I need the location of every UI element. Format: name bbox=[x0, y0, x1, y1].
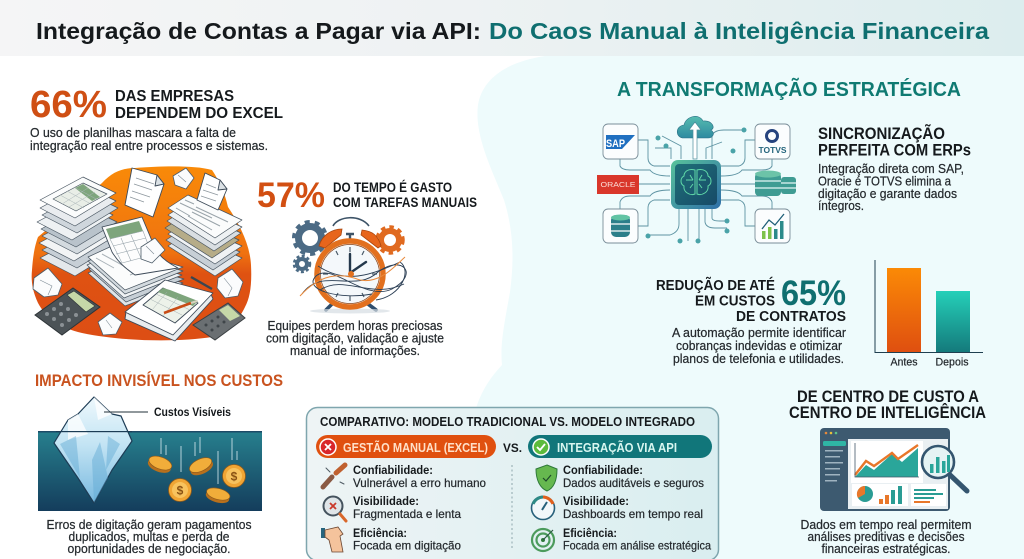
block: redução 65%: REDUÇÃO DE ATÉ bbox=[656, 276, 775, 294]
bar chart: antes e depois bbox=[875, 260, 983, 368]
SAP box: SAP bbox=[606, 138, 625, 150]
text: dados em tempo real bbox=[800, 518, 972, 556]
SAP box bbox=[603, 124, 638, 159]
text: equipes perdem horas: com digitação, validação e ajuste bbox=[266, 332, 444, 346]
stat: 66% das empresas bbox=[30, 84, 283, 153]
icon: broken chain bbox=[323, 465, 345, 487]
crumpled paper balls bbox=[33, 168, 243, 335]
bar chart: antes e depois: Antes bbox=[890, 356, 918, 368]
vs: VS. bbox=[503, 441, 522, 455]
database box bbox=[603, 209, 638, 243]
icon: target bbox=[532, 529, 554, 551]
pill: gestão manual bbox=[316, 435, 496, 458]
right rows: Visibilidade: bbox=[563, 494, 629, 508]
blue gear bbox=[294, 222, 326, 254]
tilted coin bbox=[187, 455, 215, 478]
diagram: ERP integration circuit bbox=[597, 116, 796, 244]
iceberg bbox=[54, 397, 132, 503]
dollar coin bbox=[222, 464, 246, 488]
database icon right bbox=[755, 170, 796, 196]
text: erros de digitação: duplicados, multas e perda de bbox=[68, 530, 230, 544]
pill: integração via api: INTEGRAÇÃO VIA API bbox=[557, 440, 677, 455]
circuit nodes bbox=[646, 128, 746, 244]
Oracle box: ORACLE bbox=[600, 182, 636, 189]
spreadsheet page bbox=[102, 217, 178, 275]
icon: dashboard with magnifier bbox=[820, 428, 967, 511]
orange gear bbox=[377, 227, 403, 253]
text: erros de digitação: Erros de digitação geram pagamentos bbox=[46, 518, 252, 532]
stat: 66% das empresas: DAS EMPRESAS bbox=[115, 88, 234, 105]
TOTVS box: TOTVS bbox=[758, 145, 787, 155]
right paper stack bbox=[165, 195, 242, 276]
label: custos visíveis: Custos Visíveis bbox=[154, 407, 231, 419]
panel title: COMPARATIVO: MODELO TRADICIONAL VS. MODELO INTEGRADO bbox=[320, 415, 695, 429]
block: sincronização bbox=[818, 123, 971, 213]
icon: shield bbox=[536, 465, 557, 491]
title: Integração de Contas a Pagar via API: bbox=[36, 18, 481, 44]
illustration: iceberg and coins bbox=[38, 397, 262, 511]
feet bbox=[326, 304, 376, 310]
block: redução 65%: DE CONTRATOS bbox=[736, 309, 846, 325]
stat: 66% das empresas: 66% bbox=[30, 84, 107, 126]
bottom spreadsheet sheets bbox=[125, 280, 213, 341]
block: redução 65%: cobranças indevidas e otimizar bbox=[676, 339, 842, 353]
title: Do Caos Manual à Inteligência Financeira bbox=[489, 18, 990, 44]
small gear bbox=[294, 256, 310, 272]
chip bbox=[671, 160, 721, 209]
bar chart: antes e depois: Depois bbox=[936, 356, 969, 368]
pill: gestão manual: GESTÃO MANUAL (EXCEL) bbox=[343, 440, 488, 455]
centre paper stack bbox=[87, 246, 184, 306]
stat: 57% do tempo: DO TEMPO É GASTO bbox=[333, 179, 452, 195]
block: redução 65%: EM CUSTOS bbox=[695, 294, 775, 310]
left rows: Confiabilidade: bbox=[353, 463, 433, 477]
heading: impacto invisível: IMPACTO INVISÍVEL NOS CUSTOS bbox=[35, 371, 283, 390]
background: light cyan right side bbox=[470, 56, 1024, 559]
callout line bbox=[104, 411, 148, 413]
orange blob bbox=[32, 166, 251, 340]
left rows: Focada em digitação bbox=[353, 538, 461, 552]
stat: 66% das empresas: integração real entre processos e sistemas. bbox=[30, 139, 268, 153]
icon: hand pressing key bbox=[321, 527, 343, 552]
dollar coin: $ bbox=[231, 470, 238, 484]
right rows bbox=[563, 463, 711, 552]
left paper stack bbox=[37, 177, 118, 276]
block: sincronização: íntegros. bbox=[818, 199, 864, 213]
stat: 66% das empresas: DEPENDEM DO EXCEL bbox=[115, 105, 283, 122]
circuit lines bbox=[620, 130, 772, 241]
water bbox=[38, 431, 262, 511]
text: equipes perdem horas: Equipes perdem horas preciosas bbox=[268, 319, 442, 333]
panel: comparativo bbox=[306, 408, 718, 559]
stat: 57% do tempo: COM TAREFAS MANUAIS bbox=[333, 194, 477, 210]
TOTVS box bbox=[755, 124, 790, 159]
heading: centro de inteligência: DE CENTRO DE CUSTO A bbox=[797, 388, 979, 406]
dollar coin bbox=[168, 478, 192, 502]
block: redução 65%: A automação permite identificar bbox=[672, 326, 846, 340]
pen bbox=[191, 277, 212, 289]
chart box bbox=[755, 209, 790, 243]
text: equipes perdem horas: manual de informações. bbox=[290, 344, 420, 358]
right rows: Confiabilidade: bbox=[563, 463, 643, 477]
icon: gauge bbox=[532, 496, 554, 520]
clock body bbox=[317, 241, 383, 307]
text: dados em tempo real: financeiras estratégicas. bbox=[822, 542, 950, 556]
heading: centro de inteligência bbox=[789, 388, 986, 422]
tilted coin bbox=[146, 453, 174, 476]
fall streaks bbox=[161, 437, 237, 484]
header band bbox=[0, 0, 1024, 56]
block: sincronização: PERFEITA COM ERPs bbox=[818, 142, 971, 160]
block: redução 65%: 65% bbox=[781, 274, 846, 313]
clock hands bbox=[350, 254, 366, 273]
icon: magnifier with x bbox=[324, 496, 346, 521]
left rows: Vulnerável a erro humano bbox=[353, 476, 486, 490]
handle arc bbox=[333, 218, 369, 226]
block: redução 65%: planos de telefonia e utilidades. bbox=[673, 352, 844, 366]
block: sincronização: SINCRONIZAÇÃO bbox=[818, 123, 945, 143]
Oracle box bbox=[597, 175, 639, 194]
block: sincronização: Oracie é TOTVS elimina a bbox=[818, 174, 951, 188]
text: erros de digitação bbox=[46, 518, 252, 556]
left rows: Visibilidade: bbox=[353, 494, 419, 508]
icon: alarm clock with gears and tangled lines bbox=[294, 218, 406, 314]
left calculator bbox=[35, 288, 100, 335]
tangled lines bbox=[302, 262, 406, 300]
pill: integração via api bbox=[528, 435, 712, 458]
illustration: paper chaos bbox=[32, 166, 251, 341]
stat: 57% do tempo: 57% bbox=[257, 176, 325, 215]
right calculator bbox=[193, 303, 245, 340]
cloud with arrow bbox=[677, 116, 713, 159]
right rows: Dados auditáveis e seguros bbox=[563, 476, 704, 490]
dollar coin: $ bbox=[177, 484, 184, 498]
stat: 57% do tempo bbox=[257, 176, 477, 215]
block: sincronização: digitação e garante dados bbox=[818, 187, 957, 201]
heading: transformação estratégica: A TRANSFORMAÇÃO ESTRATÉGICA bbox=[617, 78, 961, 101]
flying pages bbox=[125, 168, 227, 217]
text: equipes perdem horas bbox=[266, 319, 444, 358]
block: redução 65% bbox=[656, 274, 846, 366]
title bbox=[36, 18, 990, 44]
left rows bbox=[353, 463, 486, 552]
tilted coin bbox=[204, 486, 231, 505]
left rows: Fragmentada e lenta bbox=[353, 507, 461, 521]
right rows: Focada em análise estratégica bbox=[563, 538, 711, 552]
text: dados em tempo real: Dados em tempo real permitem bbox=[800, 518, 972, 532]
right rows: Eficiência: bbox=[563, 526, 617, 540]
bells bbox=[319, 229, 342, 248]
text: erros de digitação: oportunidades de negociação. bbox=[68, 542, 230, 556]
block: sincronização: Integração direta com SAP, bbox=[818, 162, 964, 176]
stat: 66% das empresas: O uso de planilhas mascara a falta de bbox=[30, 126, 236, 140]
heading: centro de inteligência: CENTRO DE INTELIGÊNCIA bbox=[789, 403, 986, 422]
left rows: Eficiência: bbox=[353, 526, 407, 540]
text: dados em tempo real: análises preditivas e decisões bbox=[808, 530, 964, 544]
right rows: Dashboards em tempo real bbox=[563, 507, 703, 521]
